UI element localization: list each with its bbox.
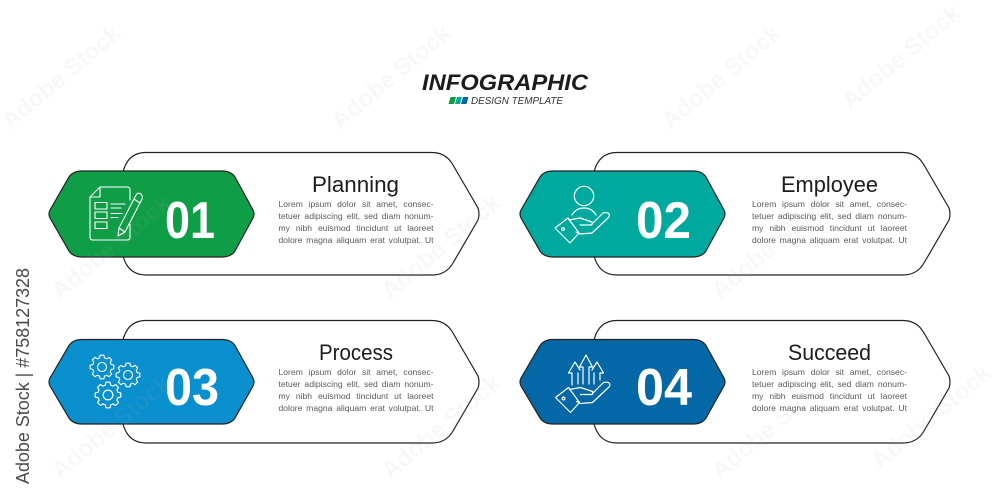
icon: document and pencil [90, 187, 142, 240]
watermark: Adobe Stock [377, 369, 507, 485]
text block: succeed [752, 367, 907, 413]
title [422, 70, 589, 107]
watermark: Adobe Stock [707, 369, 837, 485]
text block: planning: my nibh euismod tincidunt ut laoreet [278, 223, 434, 233]
subtitle with colour stripes: DESIGN TEMPLATE [471, 96, 563, 107]
text block: succeed: my nibh euismod tincidunt ut laoreet [752, 391, 907, 401]
text block: process [278, 367, 434, 413]
icon: person over hand [555, 186, 609, 243]
text block: employee: Lorem ipsum dolor sit amet, consec- [752, 199, 907, 209]
text block: process: dolore magna aliquam erat volutpat. Ut [278, 403, 434, 413]
panel: 04 succeed [520, 320, 950, 443]
text block: planning: tetuer adipiscing elit, sed diam nonum- [278, 211, 434, 221]
watermark: Adobe Stock [47, 189, 177, 305]
card outline [123, 152, 479, 275]
icon: three gears [90, 355, 140, 408]
text block: planning [278, 199, 434, 245]
panel: 03 process [49, 320, 479, 443]
hexagon badge [520, 171, 725, 257]
heading: Process [319, 340, 393, 365]
hexagon badge [520, 340, 725, 424]
text block: succeed: Lorem ipsum dolor sit amet, consec- [752, 367, 907, 377]
text block: planning: dolore magna aliquam erat volutpat. Ut [278, 235, 434, 245]
title: INFOGRAPHIC [422, 70, 589, 95]
panel: 01 planning [49, 152, 479, 275]
watermark: Adobe Stock [327, 19, 457, 135]
card outline [594, 152, 950, 275]
text block: planning: Lorem ipsum dolor sit amet, consec- [278, 199, 434, 209]
text block: succeed: dolore magna aliquam erat volutpat. Ut [752, 403, 907, 413]
card outline [594, 320, 950, 443]
text block: process: tetuer adipiscing elit, sed diam nonum- [278, 379, 434, 389]
watermark: Adobe Stock [0, 19, 127, 135]
hexagon badge [49, 340, 254, 424]
number: 03 [165, 359, 219, 417]
number: 04 [636, 359, 692, 417]
heading: Employee [781, 172, 878, 197]
icon: arrows over hand [556, 355, 610, 412]
watermark: Adobe Stock [707, 189, 837, 305]
watermark: Adobe Stock [377, 189, 507, 305]
text block: process: my nibh euismod tincidunt ut laoreet [278, 391, 434, 401]
text block: employee: my nibh euismod tincidunt ut laoreet [752, 223, 907, 233]
watermark: Adobe Stock [867, 359, 997, 475]
side credit text: Adobe Stock | #758127328 [13, 268, 33, 484]
watermark: Adobe Stock [837, 0, 967, 115]
text block: process: Lorem ipsum dolor sit amet, consec- [278, 367, 434, 377]
hexagon badge [49, 171, 254, 257]
panel: 02 employee [520, 152, 950, 275]
heading: Succeed [788, 340, 871, 365]
watermark: Adobe Stock [657, 19, 787, 135]
heading: Planning [312, 172, 399, 197]
card outline [123, 320, 479, 443]
watermark: Adobe Stock [47, 369, 177, 485]
number: 01 [165, 192, 215, 250]
text block: employee: tetuer adipiscing elit, sed diam nonum- [752, 211, 907, 221]
number: 02 [636, 192, 691, 250]
text block: succeed: tetuer adipiscing elit, sed diam nonum- [752, 379, 907, 389]
text block: employee: dolore magna aliquam erat volutpat. Ut [752, 235, 907, 245]
text block: employee [752, 199, 907, 245]
